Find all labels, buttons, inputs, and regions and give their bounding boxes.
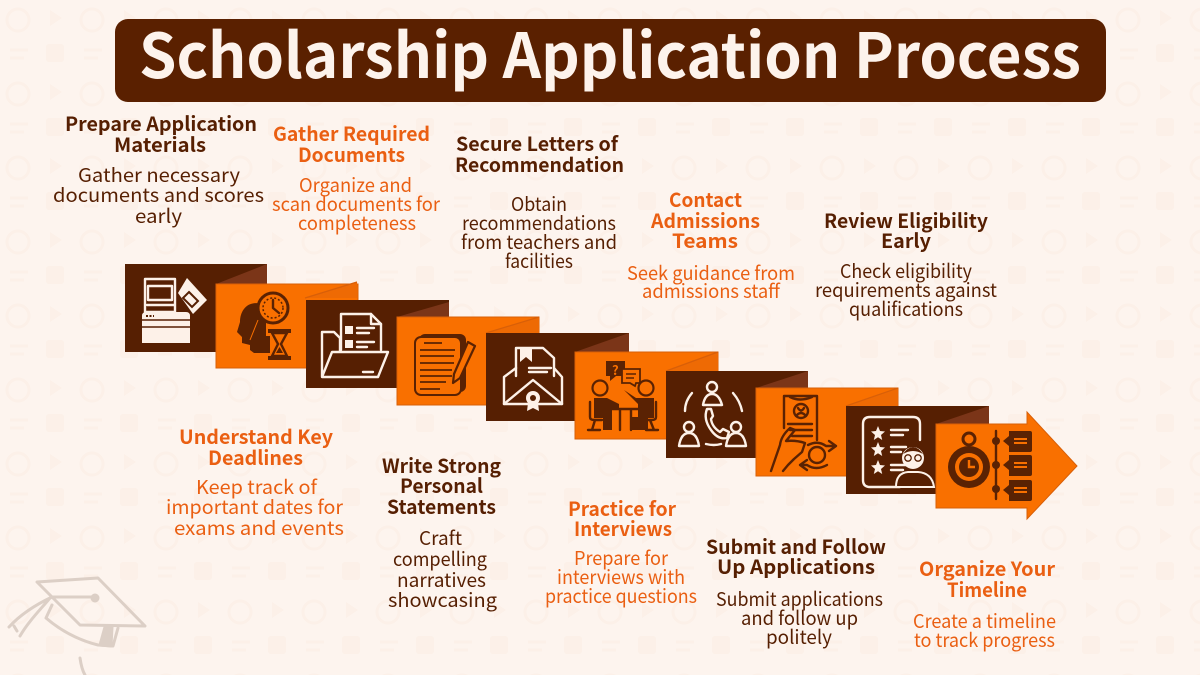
- icon: reviewer with star list: [863, 417, 934, 487]
- text block: Gather Required Documents: Organize and: [299, 171, 412, 198]
- icon: contact circle with phone: [679, 382, 746, 446]
- text block: Review Eligibility Early: Review Eligibility: [824, 205, 988, 234]
- text block: Review Eligibility Early: [815, 205, 997, 322]
- text block: Contact Admissions Teams: Admissions: [650, 205, 760, 234]
- icon: folder checklist: [322, 314, 388, 377]
- text block: Write Strong Personal Statements: Craft: [419, 524, 462, 551]
- text block: Contact Admissions Teams: Contact: [669, 184, 742, 213]
- icon: stopwatch timeline: [948, 431, 1032, 501]
- text block: Organize Your Timeline: Timeline: [947, 574, 1027, 603]
- text block: Gather Required Documents: scan documents for: [272, 190, 441, 217]
- icon: head clock hourglass: [237, 293, 291, 360]
- text block: Practice for Interviews: Practice for: [568, 493, 676, 522]
- text block: Secure Letters of Recommendation: facilities: [505, 247, 573, 274]
- step 9 panel: [846, 406, 989, 494]
- step 8 panel: [756, 388, 898, 476]
- text block: Submit and Follow Up Applications: Submit applications: [716, 585, 883, 612]
- text block: Understand Key Deadlines: Deadlines: [208, 442, 303, 471]
- text block: Submit and Follow Up Applications: and follow up: [741, 604, 858, 631]
- text block: Understand Key Deadlines: Understand Key: [179, 421, 333, 450]
- text block: Understand Key Deadlines: important dates for: [166, 493, 344, 520]
- step 7 panel: [666, 371, 808, 458]
- text block: Write Strong Personal Statements: Personal: [400, 470, 483, 499]
- text block: Submit and Follow Up Applications: Submit and Follow: [706, 531, 886, 560]
- icon: documents and folder: [142, 278, 207, 343]
- text block: Review Eligibility Early: qualifications: [849, 295, 963, 322]
- text block: Secure Letters of Recommendation: Recommendation: [455, 149, 624, 178]
- step 4 panel: [397, 317, 539, 405]
- text block: Prepare Application Materials: Materials: [114, 129, 206, 158]
- text block: Secure Letters of Recommendation: Secure Letters of: [456, 128, 619, 157]
- title banner: [115, 6, 1106, 102]
- step 5 panel: [486, 333, 629, 421]
- step 6 panel: [575, 352, 718, 439]
- text block: Gather Required Documents: Documents: [298, 139, 405, 168]
- text block: Practice for Interviews: interviews with: [557, 563, 685, 590]
- text block: Practice for Interviews: Interviews: [574, 513, 672, 542]
- text block: Contact Admissions Teams: [627, 184, 795, 304]
- text block: Gather Required Documents: Gather Required: [273, 118, 430, 147]
- text block: Prepare Application Materials: documents and scores: [53, 181, 264, 208]
- step 2 panel: [216, 282, 358, 368]
- text block: Prepare Application Materials: Gather necessary: [78, 161, 240, 188]
- text block: Secure Letters of Recommendation: from teachers and: [461, 228, 617, 255]
- text block: Contact Admissions Teams: admissions staff: [642, 277, 781, 304]
- icon: interview at table: [588, 360, 658, 430]
- step 10 arrow panel: [936, 412, 1077, 519]
- text block: Understand Key Deadlines: exams and events: [174, 514, 344, 541]
- text block: Understand Key Deadlines: [166, 421, 344, 541]
- text block: Secure Letters of Recommendation: Obtain: [511, 190, 567, 217]
- title: Scholarship Application Process: [139, 6, 1081, 96]
- text block: Practice for Interviews: [545, 493, 697, 609]
- text block: Submit and Follow Up Applications: Up Applications: [717, 551, 875, 580]
- text block: Write Strong Personal Statements: showcasing: [388, 586, 497, 613]
- text block: Prepare Application Materials: early: [135, 202, 182, 229]
- text block: Write Strong Personal Statements: Write Strong: [382, 450, 501, 479]
- text block: Organize Your Timeline: to track progress: [914, 626, 1055, 653]
- text block: Contact Admissions Teams: Teams: [672, 225, 738, 254]
- text block: Practice for Interviews: Prepare for: [574, 544, 669, 571]
- text block: Organize Your Timeline: Create a timeline: [913, 607, 1056, 634]
- text block: Write Strong Personal Statements: compelling: [393, 545, 487, 572]
- text block: Submit and Follow Up Applications: [706, 531, 886, 650]
- text block: Write Strong Personal Statements: narratives: [397, 566, 486, 593]
- text block: Review Eligibility Early: requirements against: [815, 276, 997, 303]
- text block: Contact Admissions Teams: Seek guidance from: [627, 259, 795, 286]
- text block: Understand Key Deadlines: Keep track of: [196, 473, 318, 500]
- text block: Secure Letters of Recommendation: [455, 128, 624, 274]
- text block: Write Strong Personal Statements: [382, 450, 501, 613]
- text block: Review Eligibility Early: Early: [881, 225, 931, 254]
- text block: Write Strong Personal Statements: Statements: [387, 491, 496, 520]
- text block: Organize Your Timeline: Organize Your: [919, 553, 1056, 582]
- icon: envelope with letter and ribbon: [504, 348, 562, 411]
- icon: phone profile in hand: [771, 396, 836, 471]
- text block: Gather Required Documents: completeness: [298, 209, 416, 236]
- step 3 panel: [306, 300, 449, 388]
- text block: Secure Letters of Recommendation: recommendations: [462, 209, 616, 236]
- step 1 panel: [125, 264, 267, 352]
- text block: Review Eligibility Early: Check eligibility: [840, 257, 972, 284]
- text block: Gather Required Documents: [272, 118, 441, 236]
- text block: Prepare Application Materials: Prepare Application: [65, 108, 257, 137]
- text block: Practice for Interviews: practice questions: [545, 582, 697, 609]
- text block: Submit and Follow Up Applications: politely: [766, 623, 832, 650]
- icon: graduation cap sketch: [9, 578, 145, 675]
- text block: Organize Your Timeline: [913, 553, 1056, 653]
- text block: Prepare Application Materials: [53, 108, 264, 229]
- icon: interview at table: ?: [612, 360, 619, 379]
- icon: notes and pencil: [415, 334, 475, 395]
